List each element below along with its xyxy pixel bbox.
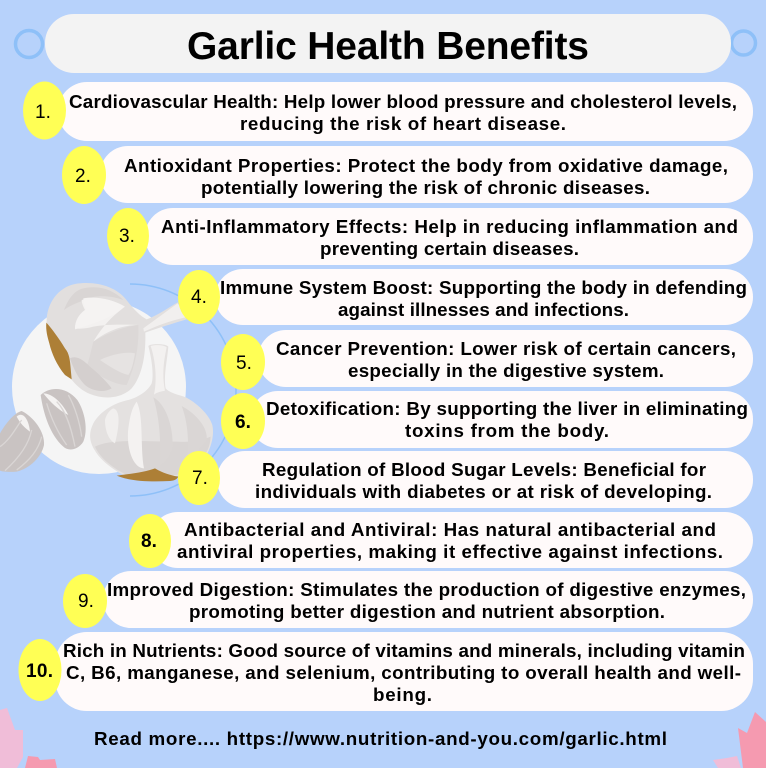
item 6 xyxy=(221,391,753,449)
item 1: 1. xyxy=(35,102,51,123)
item 2: Antioxidant Properties: Protect the body from oxidative damage, xyxy=(124,155,728,176)
item 9: promoting better digestion and nutrient absorption. xyxy=(189,601,665,622)
item 4: 4. xyxy=(191,287,207,308)
title: Garlic Health Benefits xyxy=(187,25,589,68)
bottom bulb body xyxy=(90,344,213,476)
item 8 xyxy=(129,512,753,568)
clove middle xyxy=(41,389,86,449)
item 4: against illnesses and infections. xyxy=(338,299,629,320)
item 5 xyxy=(221,330,753,390)
item 10 xyxy=(18,632,753,711)
item 3 xyxy=(107,208,753,265)
item 5: especially in the digestive system. xyxy=(348,360,664,381)
item 8: Antibacterial and Antiviral: Has natural antibacterial and xyxy=(184,519,716,540)
top bulb root xyxy=(46,323,72,379)
decorative ring left xyxy=(16,30,42,58)
item 1: reducing the risk of heart disease. xyxy=(240,113,566,134)
decorative leaves bottom left xyxy=(0,708,57,768)
item 5: 5. xyxy=(236,353,252,374)
item 4: Immune System Boost: Supporting the body in defending xyxy=(220,277,747,298)
item 10: 10. xyxy=(26,661,53,682)
item 8: antiviral properties, making it effective against infections. xyxy=(177,541,723,562)
item 7: 7. xyxy=(192,468,208,489)
item 1 xyxy=(23,82,753,141)
item 10: C, B6, manganese, and selenium, contributing to overall health and well- xyxy=(66,662,741,683)
item 7: individuals with diabetes or at risk of developing. xyxy=(255,481,712,502)
item 7 xyxy=(178,451,753,508)
item 1: Cardiovascular Health: Help lower blood pressure and cholesterol levels, xyxy=(69,91,737,112)
item 5: Cancer Prevention: Lower risk of certain cancers, xyxy=(276,338,736,359)
item 6: toxins from the body. xyxy=(405,420,609,441)
read more link text: Read more.... https://www.nutrition-and-you.com/garlic.html xyxy=(94,728,667,749)
item 7: Regulation of Blood Sugar Levels: Beneficial for xyxy=(262,459,707,480)
item 2 xyxy=(62,146,753,204)
item 3: Anti-Inflammatory Effects: Help in reducing inflammation and xyxy=(161,216,738,237)
item 6: Detoxification: By supporting the liver in eliminating xyxy=(266,398,748,419)
item 4 xyxy=(178,269,753,325)
item 2: potentially lowering the risk of chronic diseases. xyxy=(201,177,650,198)
item 2: 2. xyxy=(75,166,91,187)
item 3: preventing certain diseases. xyxy=(320,238,579,259)
item 10: Rich in Nutrients: Good source of vitamins and minerals, including vitamin xyxy=(63,640,745,661)
illustration: garlic bulbs and cloves xyxy=(0,283,236,496)
title xyxy=(45,14,731,73)
item 10: being. xyxy=(373,684,432,705)
item 6: 6. xyxy=(235,412,251,433)
item 9: Improved Digestion: Stimulates the production of digestive enzymes, xyxy=(107,579,746,600)
item 9 xyxy=(63,571,753,628)
decorative leaves bottom right xyxy=(713,712,766,768)
item 3: 3. xyxy=(119,226,135,247)
decorative ring right xyxy=(732,31,756,55)
item 9: 9. xyxy=(78,591,94,612)
clove left xyxy=(0,411,44,472)
bottom bulb root xyxy=(117,468,178,481)
top bulb body xyxy=(47,283,187,397)
item 8: 8. xyxy=(141,531,157,552)
